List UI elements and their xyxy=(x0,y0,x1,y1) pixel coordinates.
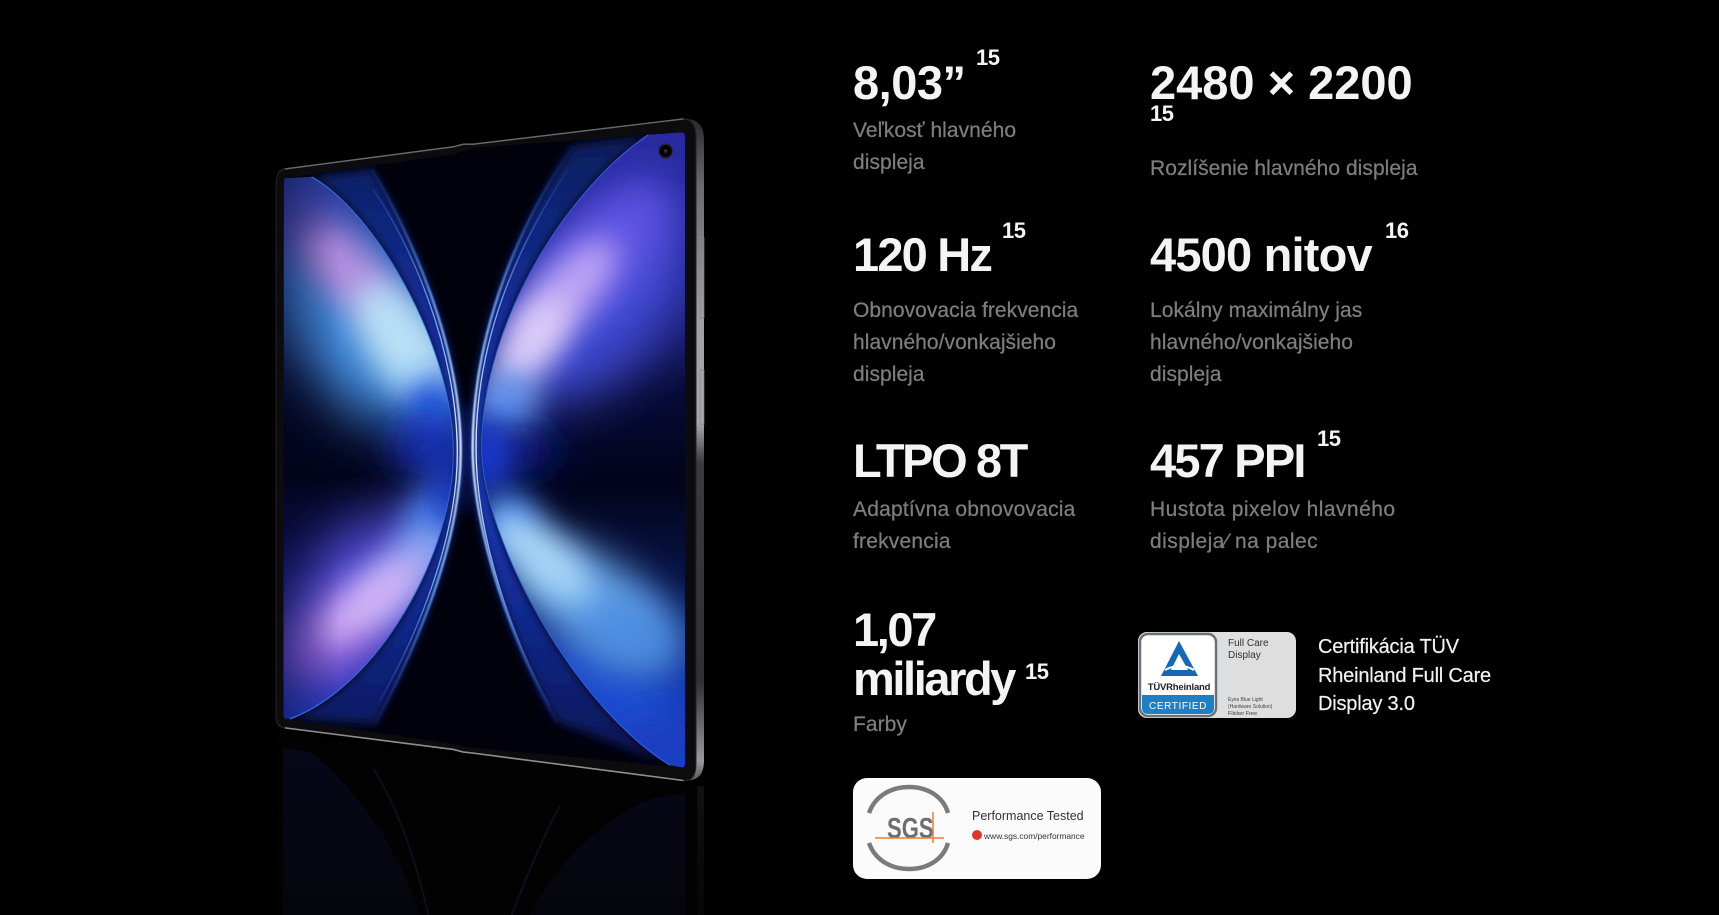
stat: pixel density: displeja⁄ na palec xyxy=(1150,530,1318,553)
caption: TÜV certification xyxy=(1318,636,1491,715)
stat: colours: 15 xyxy=(1025,659,1048,684)
SGS logo xyxy=(869,787,948,869)
blue certified bar: CERTIFIED xyxy=(1149,701,1207,712)
stat: colours: Farby xyxy=(853,713,907,736)
stat: peak brightness: hlavného/vonkajšieho xyxy=(1150,331,1353,354)
badge: TÜV Rheinland certificate: Flicker Free xyxy=(1228,711,1257,717)
stat: pixel density: Hustota pixelov hlavného xyxy=(1150,498,1395,521)
stat: main display size: Veľkosť hlavného xyxy=(853,119,1016,142)
left wing xyxy=(284,176,453,719)
stat: LTPO: LTPO 8T xyxy=(853,434,1026,487)
stat: refresh rate xyxy=(853,218,1078,386)
stat: peak brightness: Lokálny maximálny jas xyxy=(1150,299,1362,322)
red SGS dot xyxy=(972,830,982,840)
wing edge highlights xyxy=(290,135,670,765)
stat: peak brightness xyxy=(1150,218,1408,386)
side buttons xyxy=(700,237,704,424)
stat: LTPO: Adaptívna obnovovacia xyxy=(853,498,1076,521)
badge: TÜV Rheinland certificate: TÜVRheinland xyxy=(1148,682,1211,693)
stat: pixel density: 15 xyxy=(1317,426,1340,451)
stat: main display size: displeja xyxy=(853,151,925,174)
stat: pixel density xyxy=(1150,426,1395,553)
stat: peak brightness: displeja xyxy=(1150,363,1222,386)
phone reflection xyxy=(276,734,704,915)
badge: TÜV Rheinland certificate: Eyes Blue Light xyxy=(1228,697,1263,703)
badge: TÜV Rheinland certificate: Full Care xyxy=(1228,638,1269,649)
stat: refresh rate: Obnovovacia frekvencia xyxy=(853,299,1078,322)
phone body xyxy=(276,119,696,781)
stat: main display resolution: 2480 × 2200 xyxy=(1150,56,1413,109)
right wing xyxy=(482,132,685,768)
caption: TÜV certification: Display 3.0 xyxy=(1318,693,1415,715)
stat: main display resolution xyxy=(1150,56,1418,180)
stat: LTPO xyxy=(853,434,1076,553)
TÜV triangle logo xyxy=(1161,641,1198,676)
bezel highlights xyxy=(285,119,683,781)
stat: peak brightness: 4500 nitov xyxy=(1150,228,1372,281)
phone side rail xyxy=(688,119,704,781)
screen wallpaper xyxy=(284,132,685,768)
stat: pixel density: 457 PPI xyxy=(1150,434,1305,487)
blue certified bar xyxy=(1142,695,1214,714)
text: 15 xyxy=(976,45,999,70)
SGS logo: SGS xyxy=(887,813,934,845)
badge: TÜV Rheinland certificate: Display xyxy=(1228,650,1261,661)
stat: refresh rate: hlavného/vonkajšieho xyxy=(853,331,1056,354)
front camera xyxy=(659,144,672,158)
badge: TÜV Rheinland certificate: (Hardware Solution) xyxy=(1228,704,1273,710)
badge: SGS performance tested: Performance Tested xyxy=(972,809,1084,823)
text: 16 xyxy=(1385,218,1408,243)
glow strands xyxy=(372,145,573,724)
outer glow bands xyxy=(290,169,461,724)
stat: refresh rate: 120 Hz xyxy=(853,228,991,281)
stat: colours xyxy=(853,603,1048,736)
stat: main display size xyxy=(853,45,1016,174)
stat: main display resolution: Rozlíšenie hlavného displeja xyxy=(1150,157,1418,180)
stat: main display resolution: 15 xyxy=(1150,101,1173,126)
badge: SGS performance tested xyxy=(853,778,1101,879)
text: 15 xyxy=(1002,218,1025,243)
badge: TÜV Rheinland certificate xyxy=(1138,632,1296,718)
caption: TÜV certification: Rheinland Full Care xyxy=(1318,664,1491,686)
stat: colours: miliardy xyxy=(853,652,1014,705)
caption: TÜV certification: Certifikácia TÜV xyxy=(1318,636,1459,658)
phone illustration with reflection xyxy=(276,118,704,915)
badge: SGS performance tested: www.sgs.com/performance xyxy=(983,831,1085,841)
foldable phone xyxy=(276,118,704,782)
stat: refresh rate: displeja xyxy=(853,363,925,386)
stat: colours: 1,07 xyxy=(853,603,935,656)
stat: main display size: 8,03” xyxy=(853,56,965,109)
stat: LTPO: frekvencia xyxy=(853,530,951,553)
